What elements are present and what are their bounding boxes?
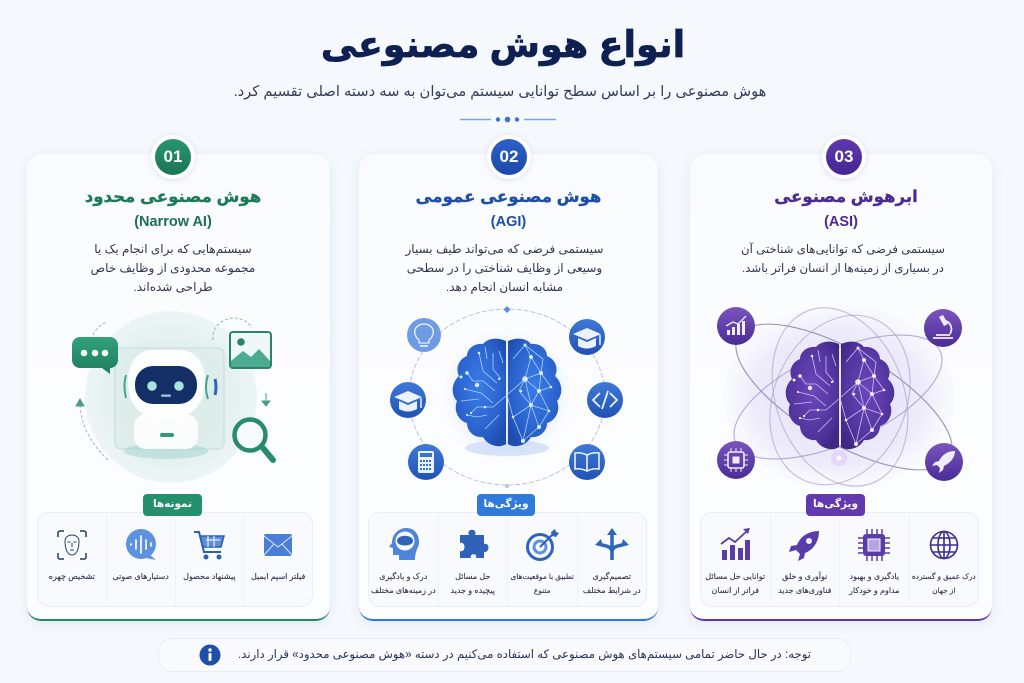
description: AGI	[405, 242, 603, 294]
title ornament	[460, 116, 556, 122]
subtitle: هوش مصنوعی را بر اساس سطح توانایی سیستم می‌توان به سه دسته اصلی تقسیم کرد.	[234, 84, 766, 100]
English name: AGI: (AGI)	[491, 214, 526, 230]
feature: deep understanding: از جهان	[932, 586, 955, 595]
feature: adaptation	[507, 513, 576, 606]
description: narrow AI: طراحی شده‌اند.	[133, 280, 213, 294]
tag: examples: نمونه‌ها	[153, 498, 192, 510]
icon: image	[230, 332, 271, 368]
example: face recognition: تشخیص چهره	[49, 572, 95, 581]
number badge 01	[151, 135, 195, 179]
feature: adaptation: متنوع	[534, 586, 551, 595]
feature: innovation: فناوری‌های جدید	[778, 586, 831, 595]
example: face recognition	[49, 530, 95, 582]
example: product recommendation	[174, 513, 243, 606]
description: narrow AI	[91, 242, 255, 294]
description: narrow AI: سیستم‌هایی که برای انجام یک یا	[94, 242, 252, 256]
icon: chart	[717, 307, 755, 345]
icon: chat bubble	[72, 337, 118, 374]
feature: decision making	[576, 513, 646, 606]
icon: chip	[717, 441, 755, 479]
tag: features: ویژگی‌ها	[484, 498, 528, 510]
example: voice assistants	[106, 513, 174, 606]
English name: narrow AI: (Narrow AI)	[134, 214, 212, 230]
feature: continuous learning: مداوم و خودکار	[849, 586, 900, 595]
features row	[700, 512, 979, 607]
examples row	[37, 512, 313, 607]
feature: continuous learning: یادگیری و بهبود	[850, 572, 899, 581]
feature: deep understanding: درک عمیق و گسترده	[912, 572, 976, 581]
icon: graduation cap	[569, 319, 605, 355]
example: spam filter: فیلتر اسپم ایمیل	[251, 572, 305, 581]
description: AGI: سیستمی فرضی که می‌تواند طیف بسیار	[406, 242, 603, 256]
icon: rocket	[925, 443, 963, 481]
tag: features	[806, 494, 865, 516]
tag: features: ویژگی‌ها	[813, 498, 858, 510]
number badge 02: 02	[500, 147, 518, 166]
example: product recommendation: پیشنهاد محصول	[183, 572, 236, 581]
icon: info	[200, 644, 220, 666]
feature: problem solving: حل مسائل	[455, 572, 490, 581]
title: انواع هوش مصنوعی	[321, 24, 685, 65]
number badge 03	[822, 135, 866, 179]
feature: decision making: در شرایط مختلف	[583, 586, 641, 595]
brain	[453, 339, 561, 446]
feature: problem solving: پیچیده و جدید	[450, 586, 495, 595]
icon: calculator	[408, 444, 444, 480]
description: AGI: مشابه انسان انجام دهد.	[446, 280, 563, 294]
number badge 03: 03	[835, 147, 853, 166]
feature: understanding	[371, 528, 436, 596]
illustration: brain with orbits	[717, 307, 963, 487]
icon: graduation cap	[390, 382, 426, 418]
feature: innovation: نوآوری و خلق	[782, 572, 827, 581]
tag: features	[477, 494, 535, 516]
feature: deep understanding	[908, 513, 978, 606]
description: ASI: در بسیاری از زمینه‌ها از انسان فراتر باشد.	[742, 262, 944, 275]
description: ASI: سیستمی فرضی که توانایی‌های شناختی آن	[741, 243, 945, 256]
feature: innovation	[770, 513, 839, 606]
heading: narrow AI: هوش مصنوعی محدود	[85, 187, 261, 206]
feature: understanding: درک و یادگیری	[379, 572, 427, 581]
English name: ASI: (ASI)	[824, 214, 858, 230]
robot	[124, 350, 216, 449]
icon: book	[569, 444, 605, 480]
panel: AGI	[359, 154, 658, 621]
description: ASI	[741, 242, 945, 275]
features row	[368, 512, 647, 607]
feature: problem solving beyond human: توانایی حل مسائل	[705, 572, 765, 581]
example: spam filter	[243, 513, 312, 606]
feature: understanding: در زمینه‌های مختلف	[371, 586, 436, 595]
heading: ASI: ابرهوش مصنوعی	[774, 187, 918, 206]
feature: problem solving	[438, 513, 507, 606]
note bar	[158, 638, 851, 672]
description: narrow AI: مجموعه محدودی از وظایف خاص	[91, 261, 255, 275]
illustration: robot	[72, 311, 276, 483]
number badge 01: 01	[164, 147, 182, 166]
tag: examples	[143, 494, 202, 516]
feature: problem solving beyond human	[705, 528, 765, 596]
panel: ASI	[690, 154, 992, 621]
brain	[786, 342, 894, 449]
icon: light bulb	[407, 318, 441, 352]
note text: توجه: در حال حاضر تمامی سیستم‌های هوش مصنوعی که استفاده می‌کنیم در دسته «هوش مصنوعی محدود» قرار دارند.	[238, 648, 811, 661]
illustration: brain with capability ring	[390, 306, 623, 488]
number badge 02	[487, 135, 531, 179]
feature: adaptation: تطبیق با موقعیت‌های	[511, 572, 574, 581]
icon: code	[587, 382, 623, 418]
feature: continuous learning	[839, 513, 908, 606]
panel: narrow AI	[27, 154, 330, 621]
icon: magnifier	[234, 420, 273, 460]
description: AGI: وسیعی از وظایف شناختی را در سطحی	[407, 261, 602, 275]
feature: problem solving beyond human: فراتر از انسان	[711, 586, 759, 595]
feature: decision making: تصمیم‌گیری	[593, 572, 631, 581]
heading: AGI: هوش مصنوعی عمومی	[416, 187, 601, 206]
example: voice assistants: دستیارهای صوتی	[112, 572, 169, 581]
icon: microscope	[924, 309, 962, 347]
